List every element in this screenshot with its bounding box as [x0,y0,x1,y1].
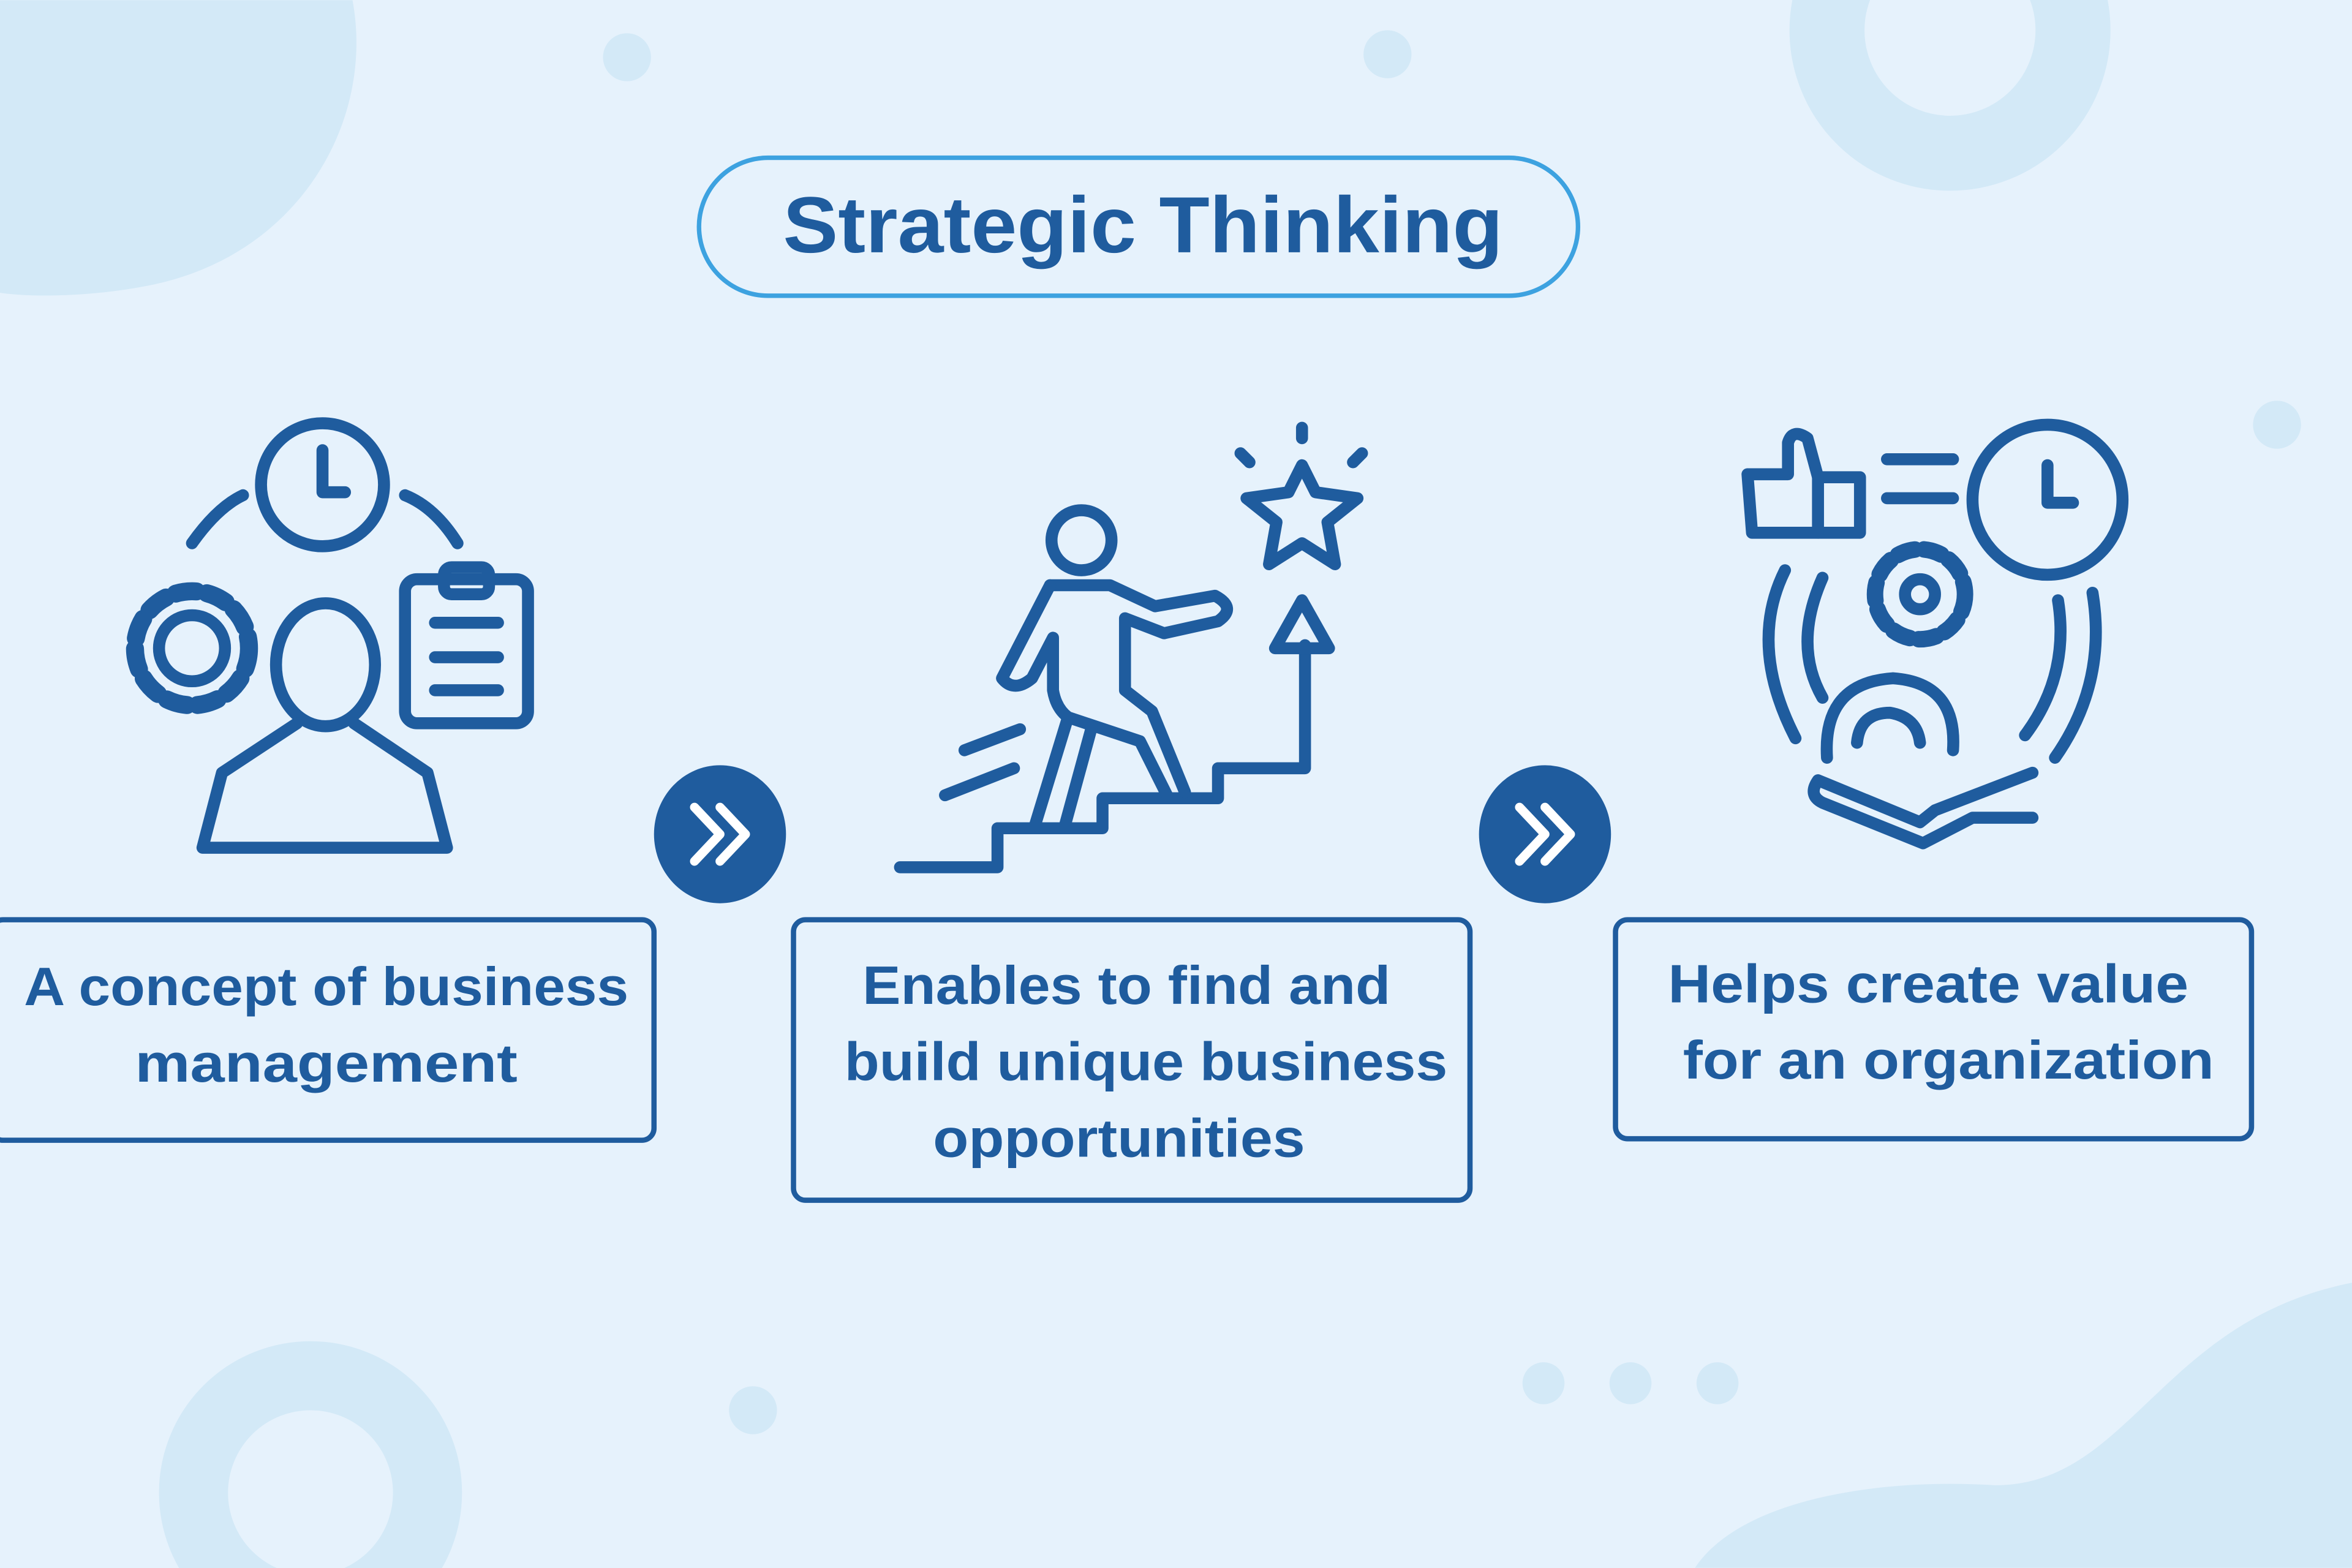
box 1 [0,920,654,1140]
box 3: Helps create value [1668,953,2188,1014]
icon: value creation [1747,424,2122,843]
box 3 [1616,920,2252,1139]
box 2: build unique business [845,1031,1447,1092]
icon: business management [135,423,528,848]
box 2 [794,920,1470,1200]
icon: climbing stairs [900,428,1362,867]
box 2: opportunities [933,1108,1305,1169]
arrow 1 [654,765,786,903]
box 3: for an organization [1683,1030,2214,1090]
title [699,158,1578,296]
box 1: A concept of business [24,956,628,1017]
box 1: management [135,1033,518,1093]
title: Strategic Thinking [783,181,1503,270]
box 2: Enables to find and [862,955,1390,1016]
arrow 2 [1479,765,1611,903]
